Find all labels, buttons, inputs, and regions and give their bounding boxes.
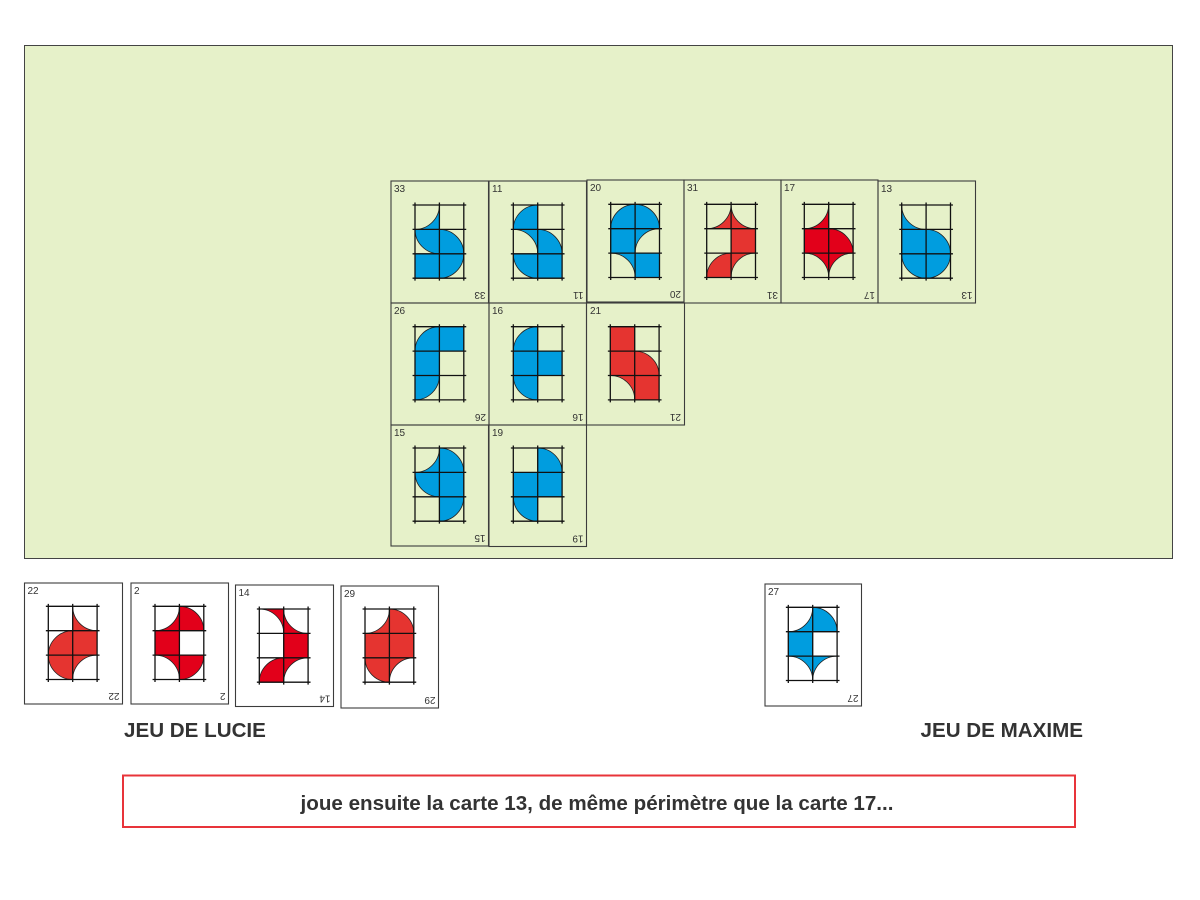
hand card 29: 29: [424, 694, 436, 705]
card 11: 11: [492, 184, 503, 195]
callout: joue ensuite la carte 13, de même périmètre que la carte 17...: [300, 792, 893, 815]
card 19: [489, 425, 586, 546]
hand card 14: [236, 585, 334, 706]
panel: game table: [24, 46, 1172, 558]
card 17: 17: [863, 289, 875, 300]
card 31: 31: [687, 183, 699, 194]
card 20: 20: [669, 288, 681, 299]
card 20: [587, 180, 684, 302]
hand card 27: [765, 584, 862, 706]
hand card 14: 14: [238, 588, 250, 599]
card 20: 20: [590, 183, 602, 194]
card 17: [781, 180, 878, 303]
hand card 2: [131, 583, 228, 704]
card 13: [878, 181, 976, 303]
card 13: 13: [961, 289, 972, 300]
card 21: 21: [590, 306, 602, 317]
card 13: 13: [881, 184, 893, 195]
card 33: 33: [474, 289, 486, 300]
hand card 27: 27: [768, 587, 780, 598]
label: Lucie's hand: JEU DE LUCIE: [124, 719, 266, 742]
card 31: [684, 180, 781, 303]
card 26: 26: [474, 411, 486, 422]
card 19: 19: [572, 532, 584, 544]
hand card 22: [24, 583, 122, 704]
card 16: [489, 303, 586, 425]
card 33: [391, 181, 488, 303]
hand card 27: 27: [847, 692, 858, 703]
card 31: 31: [766, 289, 778, 300]
callout: [123, 776, 1075, 827]
card 21: [586, 303, 684, 425]
card 21: 21: [669, 411, 681, 422]
card 11: 11: [573, 289, 584, 300]
card 16: 16: [572, 411, 584, 422]
card 26: [391, 303, 489, 425]
hand card 2: 2: [220, 690, 226, 701]
hand card 22: 22: [28, 586, 39, 597]
card 15: 15: [474, 532, 486, 543]
card 16: 16: [492, 306, 504, 317]
card 26: 26: [394, 306, 406, 317]
hand card 2: 2: [134, 586, 140, 597]
hand card 14: 14: [319, 692, 330, 704]
card 15: [391, 425, 488, 546]
hand card 22: 22: [108, 690, 120, 701]
label: Maxime's hand: JEU DE MAXIME: [920, 719, 1083, 742]
hand card 29: [341, 586, 438, 708]
card 19: 19: [492, 428, 504, 439]
card 11: [489, 181, 586, 303]
hand card 29: 29: [344, 589, 356, 600]
card 17: 17: [784, 183, 796, 194]
card 15: 15: [394, 428, 406, 439]
card 33: 33: [394, 184, 406, 195]
